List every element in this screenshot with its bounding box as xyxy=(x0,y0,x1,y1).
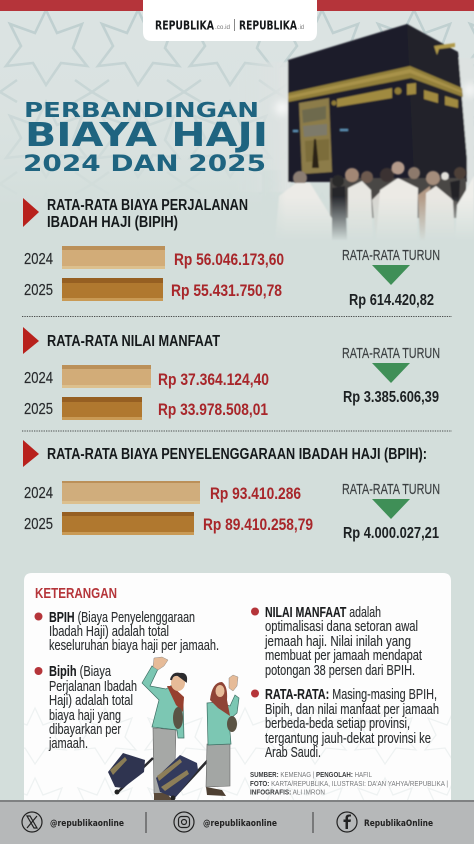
credits: INFOGRAFIS: ALI IMRON xyxy=(250,788,325,796)
credits xyxy=(250,770,448,796)
marker triangle xyxy=(23,440,39,467)
social: X: @republikaonline xyxy=(50,819,124,829)
social: X xyxy=(22,812,124,832)
definition: BPIH: keseluruhan biaya haji per jamaah. xyxy=(49,638,219,654)
panel heading: KETERANGAN xyxy=(35,585,117,602)
bar 2024: 2024 xyxy=(24,485,53,502)
title: PERBANDINGAN xyxy=(24,98,259,122)
definition: nilai manfaat xyxy=(251,605,422,679)
section: rata-rata BIPIH xyxy=(23,197,440,309)
decrease callout xyxy=(342,247,440,309)
bar 2024: Rp 93.410.286 xyxy=(210,484,301,503)
bar 2024: Rp 37.364.124,40 xyxy=(158,370,269,389)
heading: RATA-RATA NILAI MANFAAT xyxy=(47,333,220,350)
marker triangle xyxy=(23,327,39,354)
social: Instagram xyxy=(174,812,277,832)
section: BPIH xyxy=(23,440,440,542)
bar 2025 xyxy=(24,278,282,301)
bar 2025: Rp 33.978.508,01 xyxy=(158,400,268,419)
bag left xyxy=(108,753,153,794)
decrease callout xyxy=(342,345,440,406)
decrease callout xyxy=(342,481,440,542)
footer bar xyxy=(0,800,474,844)
definition: nilai manfaat: potongan 38 persen dari BPIH. xyxy=(265,663,415,679)
logo tab: REPUBLIKA xyxy=(239,18,298,32)
definition: rata-rata: tergantung jauh-dekat provinsi ke xyxy=(265,731,431,747)
decrease callout: Rp 4.000.027,21 xyxy=(343,525,439,542)
bar 2025: Rp 55.431.750,78 xyxy=(171,281,282,300)
bag right xyxy=(156,745,222,800)
bar 2025 xyxy=(24,397,268,420)
bar 2024 xyxy=(24,365,269,389)
credits: SUMBER: KEMENAG | PENGOLAH: HAFIL xyxy=(250,770,372,779)
man xyxy=(142,657,186,800)
definition: Bipih: jamaah. xyxy=(48,736,88,752)
panel: keterangan xyxy=(24,573,451,801)
pilgrims crowd xyxy=(262,162,474,242)
logo tab: .id xyxy=(298,25,304,31)
bar 2024: 2024 xyxy=(24,251,53,268)
definition: Bipih: Perjalanan Ibadah xyxy=(49,679,137,695)
definition: nilai manfaat: membuat per jamaah mendapat xyxy=(265,648,422,664)
bar 2025: 2025 xyxy=(24,401,53,418)
definition: Bipih: biaya haji yang xyxy=(49,708,121,724)
social: Instagram: @republikaonline xyxy=(203,819,277,829)
marker triangle xyxy=(23,198,39,227)
social: Facebook xyxy=(337,812,433,832)
bar 2025 xyxy=(24,512,313,535)
definition: rata-rata: berbeda-beda setiap provinsi, xyxy=(265,716,410,732)
social: Facebook: RepublikaOnline xyxy=(364,819,433,829)
photo: Kaaba with pilgrims xyxy=(235,24,474,192)
logo tab: REPUBLIKA xyxy=(155,18,215,32)
definition: BPIH: BPIH (Biaya Penyelenggaraan xyxy=(49,610,195,626)
definition: BPIH: Ibadah Haji) adalah total xyxy=(49,624,169,640)
bar 2025: 2025 xyxy=(24,282,53,299)
definition: Bipih: dibayarkan per xyxy=(49,722,121,738)
definition: nilai manfaat: jemaah haji. Nilai inilah yang xyxy=(264,634,411,650)
heading: RATA-RATA BIAYA PERJALANAN xyxy=(47,197,248,214)
heading xyxy=(47,197,248,231)
top red bar xyxy=(0,0,474,11)
heading: IBADAH HAJI (BIPIH) xyxy=(47,214,178,231)
definition: rata-rata xyxy=(251,687,439,761)
decrease callout: Rp 3.385.606,39 xyxy=(343,389,439,406)
definition: BPIH xyxy=(34,610,219,654)
bar 2025: 2025 xyxy=(24,516,53,533)
definition: nilai manfaat: NILAI MANFAAT adalah xyxy=(265,605,381,621)
illustration: pilgrims with luggage xyxy=(108,657,239,800)
section: nilai manfaat xyxy=(23,327,440,420)
bar 2025: Rp 89.410.258,79 xyxy=(203,515,313,534)
definition: rata-rata: Arab Saudi. xyxy=(265,745,321,761)
bar 2024 xyxy=(24,481,301,504)
bar 2024: Rp 56.046.173,60 xyxy=(174,250,284,269)
logo tab xyxy=(143,0,317,41)
logo tab: .co.id xyxy=(215,25,230,31)
decrease callout: Rp 614.420,82 xyxy=(349,292,434,309)
title xyxy=(23,98,268,177)
bar 2024 xyxy=(24,246,284,269)
bar 2024: 2024 xyxy=(24,370,53,387)
definition: Bipih: Haji) adalah total xyxy=(49,693,133,709)
definition: Bipih xyxy=(34,664,137,752)
title: 2024 DAN 2025 xyxy=(23,152,266,177)
definition: nilai manfaat: optimalisasi dana setoran awal xyxy=(265,619,418,635)
woman xyxy=(206,675,239,796)
definition: Bipih: Bipih (Biaya xyxy=(49,664,112,680)
title: BIAYA HAJI xyxy=(25,115,268,154)
definition: rata-rata: RATA-RATA: Masing-masing BPIH, xyxy=(265,687,437,703)
